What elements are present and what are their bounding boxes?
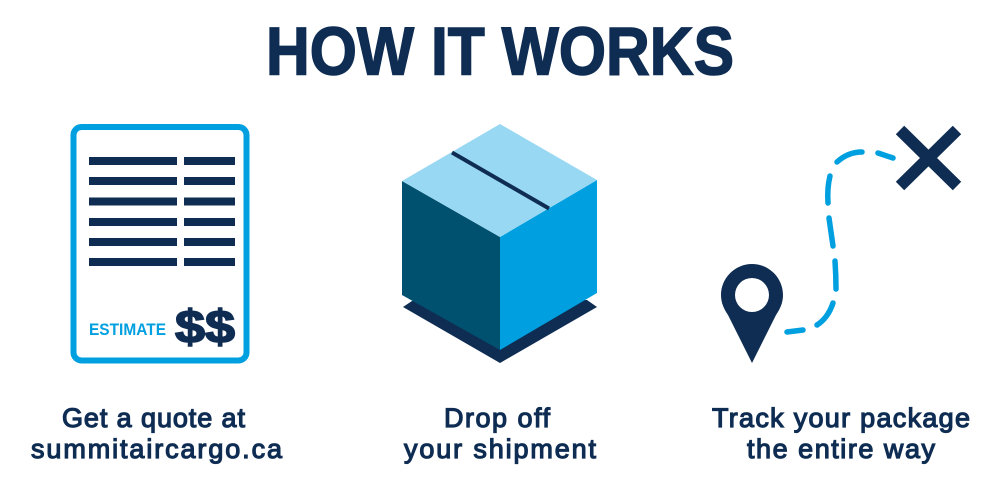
document text lines (89, 157, 235, 266)
box top face (402, 124, 597, 237)
caption: drop off (404, 403, 596, 464)
caption: get a quote: summitaircargo.ca (31, 434, 283, 464)
caption: track package (712, 403, 970, 464)
caption: track package: the entire way (747, 434, 936, 464)
caption: get a quote (31, 403, 283, 464)
box left face (402, 181, 500, 350)
estimate label: ESTIMATE (89, 320, 166, 339)
dollar signs: $$ (175, 300, 235, 352)
destination X mark (900, 130, 957, 186)
location pin (721, 264, 783, 363)
box shadow (403, 300, 597, 363)
caption: track package: Track your package (712, 403, 970, 433)
caption: drop off: Drop off (444, 403, 550, 433)
caption: drop off: your shipment (404, 434, 596, 464)
icon: cardboard box (402, 124, 597, 363)
title: HOW IT WORKS (266, 14, 734, 90)
box tape seam (452, 152, 549, 208)
icon: route map (721, 130, 957, 363)
box right face (500, 180, 597, 350)
caption: get a quote: Get a quote at (62, 403, 245, 433)
icon: estimate document (74, 127, 246, 360)
dashed route (787, 152, 893, 332)
